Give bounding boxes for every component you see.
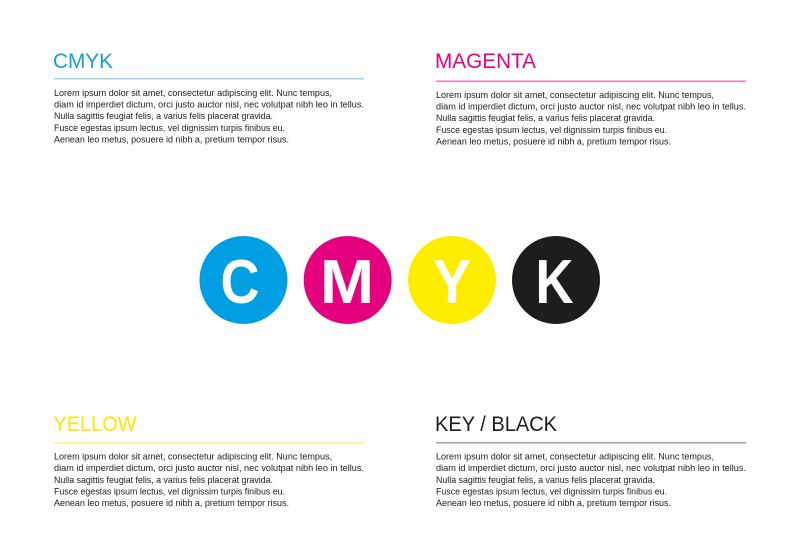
- text block: KEY / BLACK: Nulla sagittis feugiat felis, a varius felis placerat gravida.: [436, 475, 655, 485]
- text block: KEY / BLACK: Lorem ipsum dolor sit amet, consectetur adipiscing elit. Nunc tempus,: [436, 452, 714, 462]
- text block: CMYK: Aenean leo metus, posuere id nibh a, pretium tempor risus.: [54, 134, 289, 144]
- text block: CMYK: [54, 88, 364, 144]
- circle: M: [304, 236, 392, 324]
- panel: YELLOW: [54, 412, 364, 508]
- text block: KEY / BLACK: Aenean leo metus, posuere id nibh a, pretium tempor risus.: [436, 498, 671, 508]
- circle: Y: Y: [433, 248, 471, 317]
- heading: YELLOW: YELLOW: [54, 412, 137, 436]
- circle: Y: [408, 236, 496, 324]
- rule: yellow: [54, 442, 364, 443]
- text block: CMYK: Fusce egestas ipsum lectus, vel dignissim turpis finibus eu.: [54, 123, 285, 133]
- text block: YELLOW: Nulla sagittis feugiat felis, a varius felis placerat gravida.: [54, 475, 273, 485]
- CMYK circles: [200, 236, 600, 324]
- text block: YELLOW: Lorem ipsum dolor sit amet, consectetur adipiscing elit. Nunc tempus,: [54, 452, 332, 462]
- rule: black: [436, 442, 746, 443]
- heading: MAGENTA: MAGENTA: [435, 49, 537, 73]
- text block: YELLOW: Aenean leo metus, posuere id nibh a, pretium tempor risus.: [54, 498, 289, 508]
- text block: CMYK: Nulla sagittis feugiat felis, a varius felis placerat gravida.: [54, 111, 273, 121]
- text block: MAGENTA: Nulla sagittis feugiat felis, a varius felis placerat gravida.: [436, 113, 655, 123]
- text block: MAGENTA: Lorem ipsum dolor sit amet, consectetur adipiscing elit. Nunc tempus,: [436, 90, 714, 100]
- circle: M: M: [320, 248, 374, 317]
- text block: YELLOW: diam id imperdiet dictum, orci justo auctor nisl, nec volutpat nibh leo in tellus.: [54, 463, 364, 473]
- text block: KEY / BLACK: [436, 452, 746, 508]
- circle: C: C: [220, 248, 260, 317]
- circle: C: [200, 236, 288, 324]
- circle: K: K: [536, 248, 574, 317]
- heading: KEY / BLACK: KEY / BLACK: [435, 412, 558, 436]
- text block: MAGENTA: Aenean leo metus, posuere id nibh a, pretium tempor risus.: [436, 136, 671, 146]
- heading: CMYK: CMYK: [53, 49, 114, 73]
- text block: MAGENTA: diam id imperdiet dictum, orci justo auctor nisl, nec volutpat nibh leo in tellus.: [436, 102, 746, 112]
- panel: KEY / BLACK: [435, 412, 746, 508]
- rule: cyan: [54, 78, 364, 79]
- text block: CMYK: Lorem ipsum dolor sit amet, consectetur adipiscing elit. Nunc tempus,: [54, 88, 332, 98]
- text block: KEY / BLACK: Fusce egestas ipsum lectus, vel dignissim turpis finibus eu.: [436, 486, 667, 496]
- text block: MAGENTA: [436, 90, 746, 146]
- panel: CMYK: [53, 49, 364, 144]
- circle: K: [512, 236, 600, 324]
- text block: KEY / BLACK: diam id imperdiet dictum, orci justo auctor nisl, nec volutpat nibh leo in tellus.: [436, 463, 746, 473]
- text block: YELLOW: [54, 452, 364, 508]
- rule: magenta: [436, 81, 746, 82]
- text block: CMYK: diam id imperdiet dictum, orci justo auctor nisl, nec volutpat nibh leo in tellus.: [54, 100, 364, 110]
- panel: MAGENTA: [435, 49, 746, 146]
- text block: MAGENTA: Fusce egestas ipsum lectus, vel dignissim turpis finibus eu.: [436, 125, 667, 135]
- text block: YELLOW: Fusce egestas ipsum lectus, vel dignissim turpis finibus eu.: [54, 486, 285, 496]
